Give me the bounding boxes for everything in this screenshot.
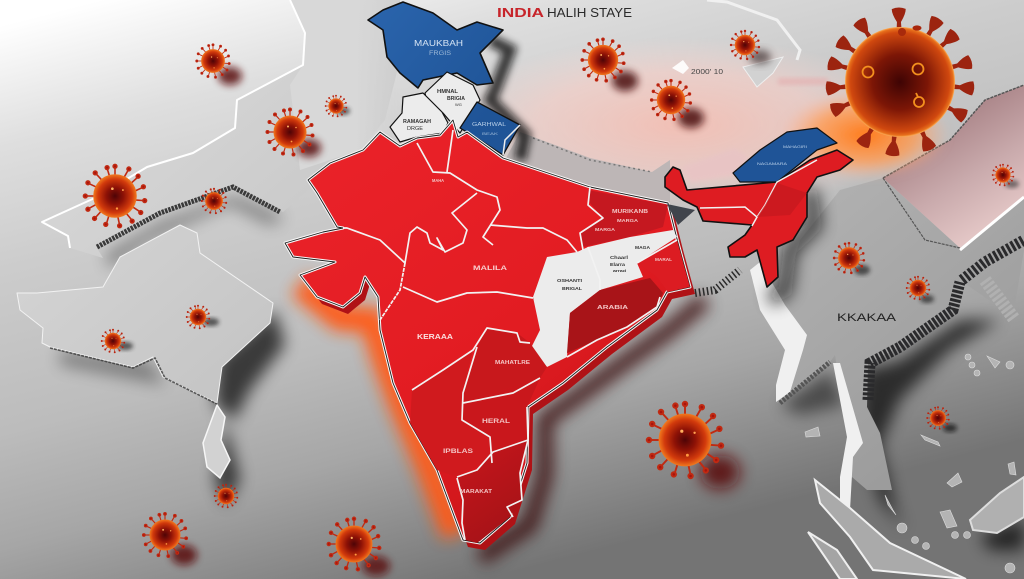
virus <box>647 402 740 489</box>
panel: northeast blue state <box>733 128 837 182</box>
northern patch <box>682 148 748 182</box>
virus <box>906 276 934 303</box>
panel: white northern states: RAMAGAH <box>403 119 431 125</box>
map labels on white states: MAGA <box>635 245 651 250</box>
region: mid south state <box>462 378 540 452</box>
virus <box>101 329 133 353</box>
virus <box>992 164 1019 188</box>
region: dark red eastern state <box>567 278 663 353</box>
small island top <box>743 57 783 87</box>
virus <box>327 517 390 576</box>
dark spiky coast east <box>780 240 1024 403</box>
region: white central state <box>530 230 677 367</box>
region: southern tip state <box>457 440 528 543</box>
map labels on red states: MURIKANB <box>612 209 648 215</box>
region: red coastal state <box>637 240 690 292</box>
map labels on white states: arrad <box>613 268 627 273</box>
land shadows <box>60 195 1024 550</box>
map labels on white states: OSHANTI <box>557 278 582 283</box>
map labels on red states: MARAKAT <box>460 489 492 495</box>
map labels on red states: MAHATLRE <box>495 360 530 366</box>
land: eastern neighbour <box>750 178 1024 507</box>
virus <box>201 188 227 214</box>
panel: white northern states: DRGE <box>407 126 424 132</box>
panel: northeast blue state: MAHAGIRI <box>783 144 807 149</box>
orange glow around large virus <box>780 90 950 180</box>
panel: northeast red states <box>665 150 853 287</box>
pink bar <box>778 78 828 85</box>
country label: KKAKAA <box>837 312 897 324</box>
coastal shadow and red glow east <box>480 300 705 558</box>
title: HALIH STAYE <box>547 6 632 20</box>
coastal orange glow <box>300 285 455 535</box>
river top right <box>707 0 800 60</box>
pink glow in the north <box>440 37 920 213</box>
map labels on red states: MARGA <box>617 218 639 223</box>
virus <box>927 407 957 432</box>
panel: white northern states: WG <box>455 102 462 107</box>
virus <box>143 513 197 565</box>
coast ridges <box>50 187 280 404</box>
map labels on white states: BRIGAL <box>562 286 582 291</box>
virus <box>325 95 350 117</box>
map labels on red states: KERAAA <box>417 334 453 341</box>
virus <box>196 44 242 85</box>
pink territory edges <box>883 85 1024 250</box>
virus <box>650 79 704 128</box>
land: northern neighbour <box>42 0 400 258</box>
white coastline east <box>750 262 863 510</box>
virus <box>214 484 238 508</box>
virus <box>581 38 638 91</box>
region: central deccan state <box>462 328 547 403</box>
panel: white northern states: HMNAL <box>437 89 458 95</box>
panel: India red mainland <box>285 120 690 543</box>
panel: north blue state: MAUKBAH <box>414 39 463 48</box>
northern land fade toward the east <box>290 0 400 170</box>
panel: white northern states <box>390 72 480 142</box>
kashmir shadow <box>490 40 525 160</box>
panel: blue eastern state: BEAK <box>482 131 498 136</box>
large virus <box>825 7 975 157</box>
virus <box>83 164 147 228</box>
panel: blue eastern state: GARHWAL <box>472 122 506 128</box>
map labels on red states: IPBLAS <box>443 448 474 455</box>
map labels on white states: Elarra <box>610 262 626 267</box>
panel: north blue state: FRGIS <box>429 51 451 57</box>
map labels on white states <box>557 245 651 291</box>
title: INDIA <box>497 6 544 20</box>
virus <box>730 30 771 64</box>
map labels on red states <box>417 178 672 495</box>
virus <box>266 108 321 157</box>
himalayan land band <box>505 132 670 210</box>
virus <box>833 242 870 275</box>
islands <box>805 354 1024 579</box>
northern neighbour coastline <box>42 0 305 248</box>
dark coast near delta <box>695 270 740 293</box>
panel: blue eastern state <box>460 102 520 155</box>
map labels on red states: MARGA <box>595 227 616 232</box>
panel: north blue state <box>368 2 503 88</box>
panel: northeast blue state: NAGAMARA <box>757 161 787 166</box>
map labels on red states: HERAL <box>482 418 510 425</box>
virus <box>186 305 219 329</box>
northeast shadow <box>770 190 815 300</box>
land: island south of peninsula <box>203 405 230 478</box>
map labels on red states: ARABIA <box>597 305 629 311</box>
land: western peninsula <box>17 225 273 403</box>
himalayan edge <box>533 138 652 172</box>
map labels on red states: MARAL <box>655 257 672 262</box>
pink territory <box>883 85 1024 248</box>
dark wedge between states <box>667 204 695 225</box>
extruded side of mainland <box>305 165 695 550</box>
region: western south state <box>410 350 492 477</box>
date label with chevron icon: 2000' 10 <box>691 67 723 76</box>
region: top right dark red state <box>580 190 668 247</box>
map labels on white states: Chaarl <box>610 255 628 260</box>
title <box>497 6 632 20</box>
panel: white northern states: BRIGIA <box>447 96 465 102</box>
date label with chevron icon <box>672 60 723 76</box>
map labels on red states: MAHA <box>432 178 445 183</box>
map labels on red states: MALILA <box>473 266 508 272</box>
state borders <box>343 130 677 540</box>
